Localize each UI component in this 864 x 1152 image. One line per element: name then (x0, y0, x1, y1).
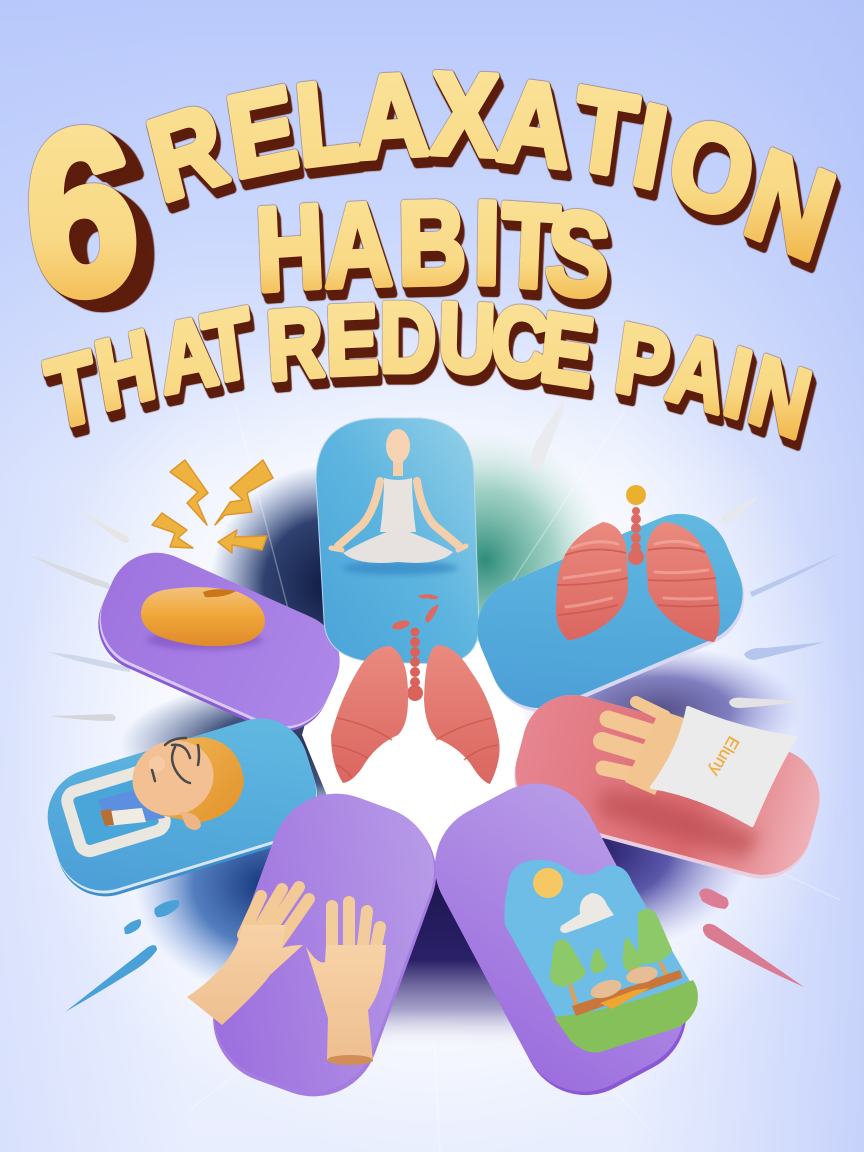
heading line: RELAXATION: A (353, 49, 431, 183)
panel: meditation card (316, 418, 479, 664)
heading line: HABITS: T (498, 178, 562, 314)
icon: pillow (652, 708, 795, 825)
heading line: THAT REDUCE PAIN: T (40, 330, 105, 450)
heading line: THAT REDUCE PAIN: C (489, 285, 551, 399)
card: right pink (503, 684, 831, 890)
heading line: THAT REDUCE PAIN: N (740, 334, 820, 460)
card: left blue (36, 707, 330, 908)
heading line: THAT REDUCE PAIN: H (88, 309, 162, 431)
panel: relaxing person card (36, 707, 330, 908)
ground (554, 980, 698, 1052)
cloud (560, 893, 614, 933)
heading line: HABITS: I (473, 176, 501, 309)
heading line: RELAXATION: O (657, 91, 766, 247)
card: bottom right purple (413, 762, 708, 1117)
trees (552, 911, 670, 985)
heading line: RELAXATION: E (220, 61, 304, 202)
heading line: RELAXATION: I (625, 79, 675, 213)
sun (533, 868, 563, 898)
heading line: HABITS: S (542, 184, 614, 323)
heading line: THAT REDUCE PAIN: U (437, 282, 497, 394)
icon: breath swirls (391, 594, 439, 631)
heading line: THAT REDUCE PAIN: I (716, 327, 760, 439)
shaded halo behind cards (120, 430, 800, 1050)
icon: heat pad (141, 587, 265, 650)
panel: hands card (187, 775, 455, 1115)
tree trunks (570, 962, 668, 1010)
heading line: THAT REDUCE PAIN: E (536, 292, 598, 408)
heading line: RELAXATION: L (291, 54, 363, 191)
heading line: THAT REDUCE PAIN: R (264, 287, 326, 401)
icon: person lying down (65, 729, 244, 854)
heading line: RELAXATION: T (566, 62, 644, 201)
wooden path (572, 970, 682, 1016)
panel: breathing lungs card (462, 485, 760, 727)
numeral 6: 6 (15, 77, 147, 348)
heading line: RELAXATION: N (732, 123, 848, 288)
card: center blue (316, 418, 479, 664)
heading line: RELAXATION: X (430, 48, 500, 180)
icon: two hands (187, 887, 386, 1065)
icon: nature scene (504, 860, 698, 1052)
heading line: THAT REDUCE PAIN: A (661, 312, 735, 434)
icon: pain lightning bolts (152, 460, 273, 553)
title (15, 48, 848, 460)
pillow label text: Eluny (705, 733, 743, 780)
icon: meditating figure (331, 429, 466, 575)
heading line: THAT REDUCE PAIN: D (380, 283, 436, 393)
panel: heat pad card (83, 537, 355, 747)
icon: lungs on card (556, 485, 720, 642)
heading line: THAT REDUCE PAIN: E (324, 284, 380, 396)
card: left top purple (83, 537, 355, 747)
motion dashes and rays (30, 400, 840, 1152)
card: right top blue (462, 498, 760, 727)
heading line: THAT REDUCE PAIN: P (610, 302, 676, 422)
panel: pillow and hand card (503, 684, 831, 890)
card: bottom left purple (195, 775, 455, 1115)
panel: center lungs (331, 628, 500, 784)
heading line: HABITS: A (322, 177, 394, 312)
heading line: THAT REDUCE PAIN: T (198, 287, 259, 404)
heading line: RELAXATION: A (493, 54, 577, 192)
heading line: THAT REDUCE PAIN: A (153, 295, 223, 415)
heading line: HABITS: B (397, 176, 467, 310)
heading line: HABITS: H (253, 179, 327, 316)
panel: nature scene card (413, 762, 708, 1117)
icon: hand under pillow (600, 702, 795, 858)
heading line: RELAXATION: R (137, 78, 237, 226)
